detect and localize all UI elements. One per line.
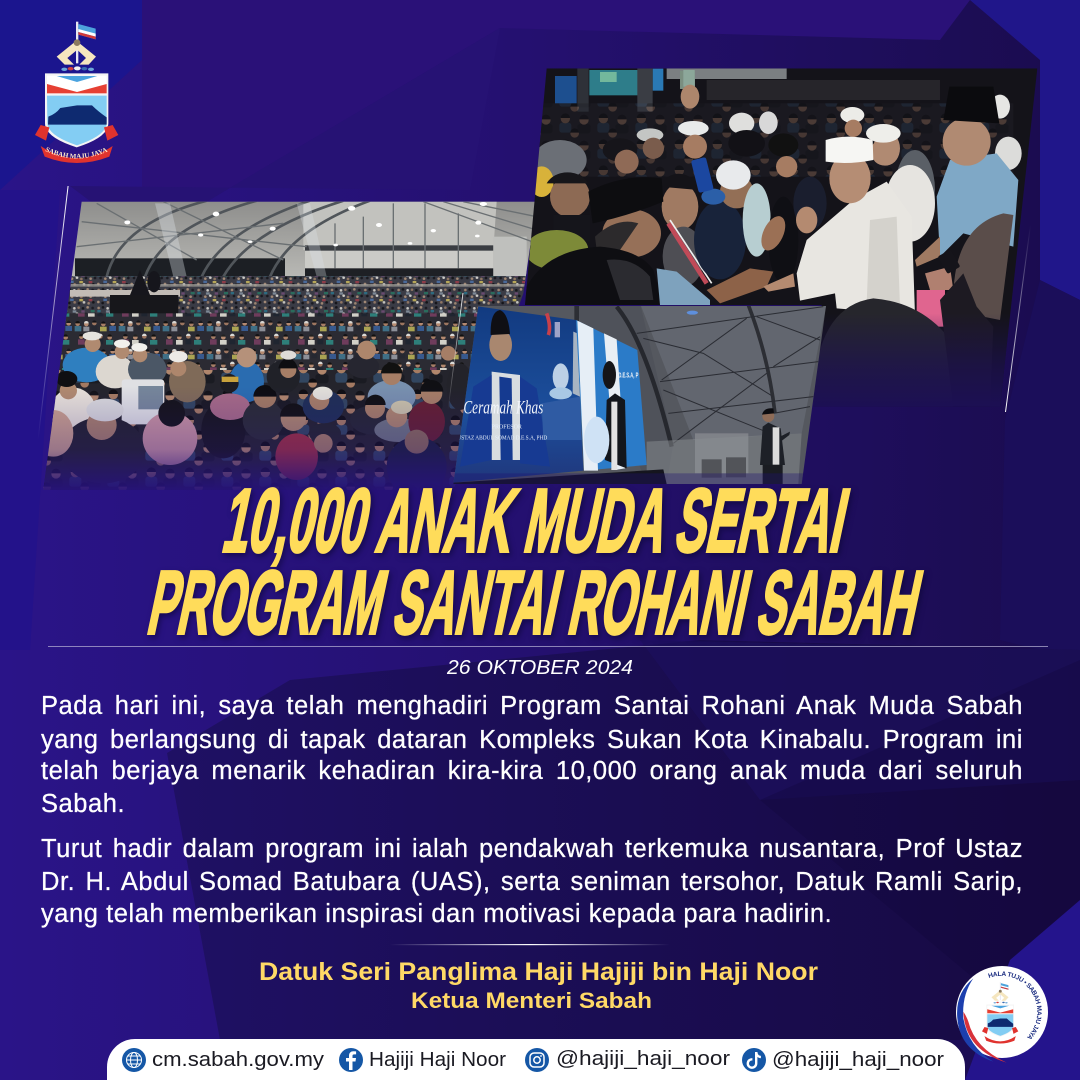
paragraph one bbox=[40, 692, 1023, 818]
logo: Sabah crest bbox=[35, 22, 118, 163]
seated crowd near rows bbox=[44, 370, 464, 490]
panel: left photo frame line bbox=[38, 186, 330, 440]
seated crowd far rows bbox=[60, 283, 533, 323]
stage floor bbox=[450, 469, 667, 484]
tent ceiling bbox=[70, 202, 534, 284]
footer contact bar bbox=[107, 1039, 965, 1080]
paragraph one: Sabah. bbox=[41, 790, 125, 818]
stage block bbox=[70, 270, 180, 314]
panel: right photo frame line bbox=[825, 225, 1031, 412]
back of hall with screens bbox=[555, 68, 940, 112]
on-screen caption bbox=[457, 397, 547, 441]
icon: tiktok bbox=[742, 1048, 766, 1072]
paragraph two: Turut hadir dalam program ini ialah pendakwah terkemuka nusantara, Prof Ustaz bbox=[41, 835, 1023, 863]
audience members in front bbox=[33, 332, 473, 497]
ribbon: SABAH MAJU JAYA bbox=[45, 147, 108, 159]
crowd caps and heads at the back bbox=[537, 70, 1022, 198]
on-screen caption: USTAZ ABDUL SOMAD D.E.S.A, PHD bbox=[457, 434, 547, 441]
instagram text: @hajiji_haji_noor bbox=[556, 1048, 730, 1070]
date: 26 OKTOBER 2024 bbox=[446, 657, 633, 679]
paragraph two bbox=[40, 835, 1023, 928]
title rule bbox=[48, 646, 1048, 647]
foreground heads bbox=[819, 213, 1014, 360]
panel: crowd photo in the tent bbox=[30, 200, 543, 497]
panel: stage and large screen photo bbox=[447, 303, 830, 487]
signature: Datuk Seri Panglima Haji Hajiji bin Haji Noor bbox=[259, 958, 818, 986]
badge: Hala Tuju Sabah Maju Jaya bbox=[956, 966, 1048, 1062]
white robe and officials bbox=[763, 87, 1018, 327]
seated crowd middle rows bbox=[58, 313, 478, 374]
website text: cm.sabah.gov.my bbox=[152, 1049, 324, 1071]
on-screen caption: Ceramah Khas bbox=[463, 397, 543, 418]
tiktok text: @hajiji_haji_noor bbox=[772, 1049, 944, 1071]
bottom fade to background bbox=[44, 395, 464, 490]
signature divider bbox=[390, 944, 670, 945]
icon: facebook bbox=[339, 1048, 363, 1072]
panel: middle photo frame line bbox=[448, 293, 600, 410]
icon: website globe bbox=[122, 1048, 146, 1072]
on-screen caption: PROFESOR bbox=[492, 424, 522, 430]
large video screen, right panel bbox=[576, 320, 647, 471]
signature: Ketua Menteri Sabah bbox=[411, 988, 652, 1013]
screen side text: D.E.S.A, P bbox=[618, 370, 638, 379]
badge: Hala Tuju Sabah Maju Jaya: HALA TUJU • SABAH MAJU JAYA bbox=[988, 971, 1042, 1039]
foreground man in black cap bbox=[525, 177, 710, 305]
paragraph one: yang berlangsung di tapak dataran Kompleks Sukan Kota Kinabalu. Program ini bbox=[41, 726, 1023, 754]
large video screen, left panel bbox=[453, 306, 583, 483]
icon: instagram bbox=[525, 1048, 549, 1072]
tent roof structure bbox=[573, 303, 827, 484]
speaker on stage bbox=[760, 408, 790, 484]
panel: chief minister greeting crowd photo bbox=[520, 67, 1040, 410]
paragraph two: Dr. H. Abdul Somad Batubara (UAS), serta seniman tersohor, Datuk Ramli Sarip, bbox=[41, 868, 1023, 896]
balcony audience bbox=[70, 276, 530, 285]
paragraph two: yang telah memberikan inspirasi dan motivasi kepada para hadirin. bbox=[41, 900, 832, 928]
crowd in front bbox=[525, 157, 827, 303]
bottom fade to background bbox=[814, 317, 1008, 406]
title bbox=[141, 471, 930, 653]
facebook text: Hajiji Haji Noor bbox=[369, 1049, 506, 1071]
signature bbox=[259, 958, 818, 1013]
paragraph one: telah berjaya menarik kehadiran kira-kira 10,000 orang anak muda dari seluruh bbox=[41, 757, 1023, 785]
ribbon bbox=[35, 125, 118, 163]
paragraph one: Pada hari ini, saya telah menghadiri Program Santai Rohani Anak Muda Sabah bbox=[41, 692, 1023, 720]
